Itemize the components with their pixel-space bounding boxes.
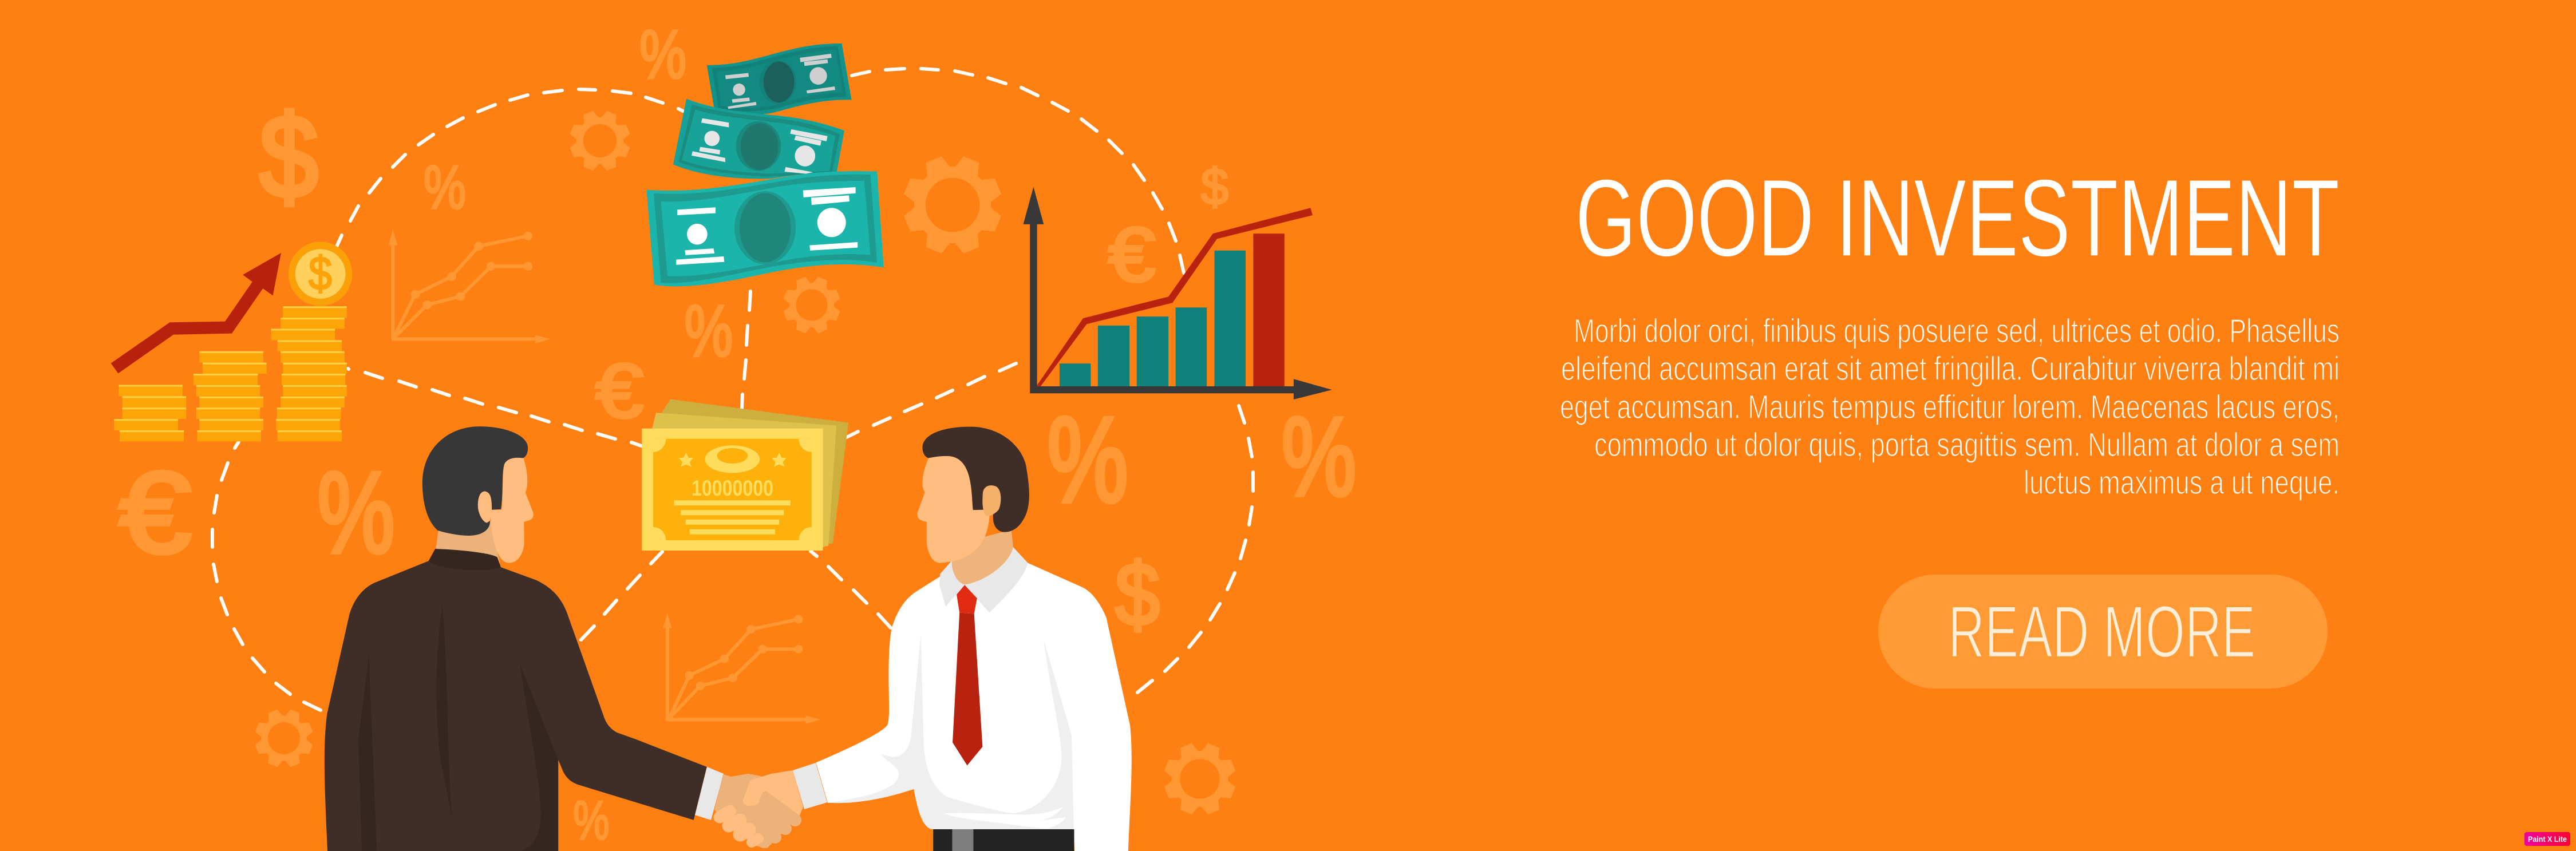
faint background symbols: % bbox=[1282, 394, 1356, 519]
cuff right bbox=[793, 763, 827, 809]
hair bbox=[422, 426, 528, 536]
face bbox=[917, 456, 989, 563]
faint background symbols: $ bbox=[1115, 545, 1160, 644]
shirt cuff left bbox=[695, 767, 724, 820]
large banknote bbox=[646, 171, 884, 286]
face bbox=[491, 457, 534, 563]
medium banknote bbox=[673, 98, 844, 179]
big coin bbox=[289, 242, 352, 306]
faint background symbols bbox=[119, 17, 1356, 850]
growth arrow bbox=[111, 253, 281, 374]
tie bbox=[957, 585, 977, 613]
body paragraph: eleifend accumsan erat sit amet fringilla. Curabitur viverra blandit mi bbox=[1561, 350, 2340, 387]
back hand bbox=[714, 774, 801, 848]
ear bbox=[982, 485, 1001, 516]
neck bbox=[952, 530, 1013, 584]
ear bbox=[478, 492, 492, 523]
faint background symbols: % bbox=[639, 17, 686, 93]
faint background symbols: % bbox=[685, 291, 733, 371]
coin highlights bbox=[114, 306, 347, 432]
faint line chart lower bbox=[663, 613, 820, 724]
shirt shading bbox=[828, 635, 1074, 829]
coin stacks with growth arrow bbox=[111, 242, 352, 441]
shirt fold highlight bbox=[945, 806, 1066, 829]
hair bbox=[922, 427, 1029, 532]
coin bodies bbox=[114, 306, 347, 441]
body paragraph bbox=[1560, 312, 2340, 501]
right man's hand bbox=[743, 770, 803, 816]
certificate bbox=[642, 399, 848, 551]
businessman left bbox=[325, 426, 724, 851]
trend line bbox=[1037, 208, 1313, 386]
faint background symbols: € bbox=[595, 349, 643, 434]
bar chart with trend line bbox=[1024, 187, 1332, 399]
faint background symbols: % bbox=[424, 153, 466, 221]
businessman right bbox=[816, 427, 1132, 851]
jacket bbox=[325, 561, 707, 851]
bars bbox=[1060, 251, 1246, 386]
faint background symbols: % bbox=[317, 448, 395, 577]
watermark badge bbox=[2524, 832, 2570, 846]
faint line chart upper bbox=[388, 230, 551, 343]
handshake bbox=[714, 763, 827, 848]
read more button bbox=[1878, 575, 2328, 688]
faint background symbols: % bbox=[1047, 392, 1128, 527]
read more button: READ MORE bbox=[1948, 591, 2255, 673]
neck bbox=[436, 521, 500, 563]
banknotes bbox=[646, 43, 884, 286]
jacket folds bbox=[358, 604, 558, 851]
watermark badge: Paint X Lite bbox=[2528, 834, 2567, 844]
certificate amount: 10000000 bbox=[692, 476, 773, 501]
left man's fingers bbox=[720, 811, 730, 817]
small banknote bbox=[707, 43, 852, 115]
body paragraph: eget accumsan. Mauris tempus efficitur lorem. Maecenas lacus eros, bbox=[1560, 389, 2340, 426]
body paragraph: luctus maximus a ut neque. bbox=[2024, 464, 2340, 501]
collar bbox=[939, 547, 1028, 612]
faint background symbols: € bbox=[119, 449, 191, 577]
body paragraph: Morbi dolor orci, finibus quis posuere sed, ultrices et odio. Phasellus bbox=[1574, 312, 2340, 350]
faint background symbols: % bbox=[573, 790, 610, 850]
coin dollar sign: $ bbox=[309, 247, 332, 300]
shirt bbox=[816, 563, 1132, 851]
axes bbox=[1024, 187, 1332, 399]
faint background symbols: $ bbox=[1201, 158, 1228, 215]
collar bbox=[429, 549, 501, 570]
belt bbox=[933, 829, 1074, 851]
faint background symbols: $ bbox=[259, 91, 318, 222]
faint background symbols: € bbox=[1108, 212, 1155, 298]
dashed connection lines bbox=[212, 69, 1253, 710]
body paragraph: commodo ut dolor quis, porta sagittis sem. Nullam at dolor a sem bbox=[1594, 426, 2340, 464]
faint gears bbox=[254, 110, 1236, 816]
